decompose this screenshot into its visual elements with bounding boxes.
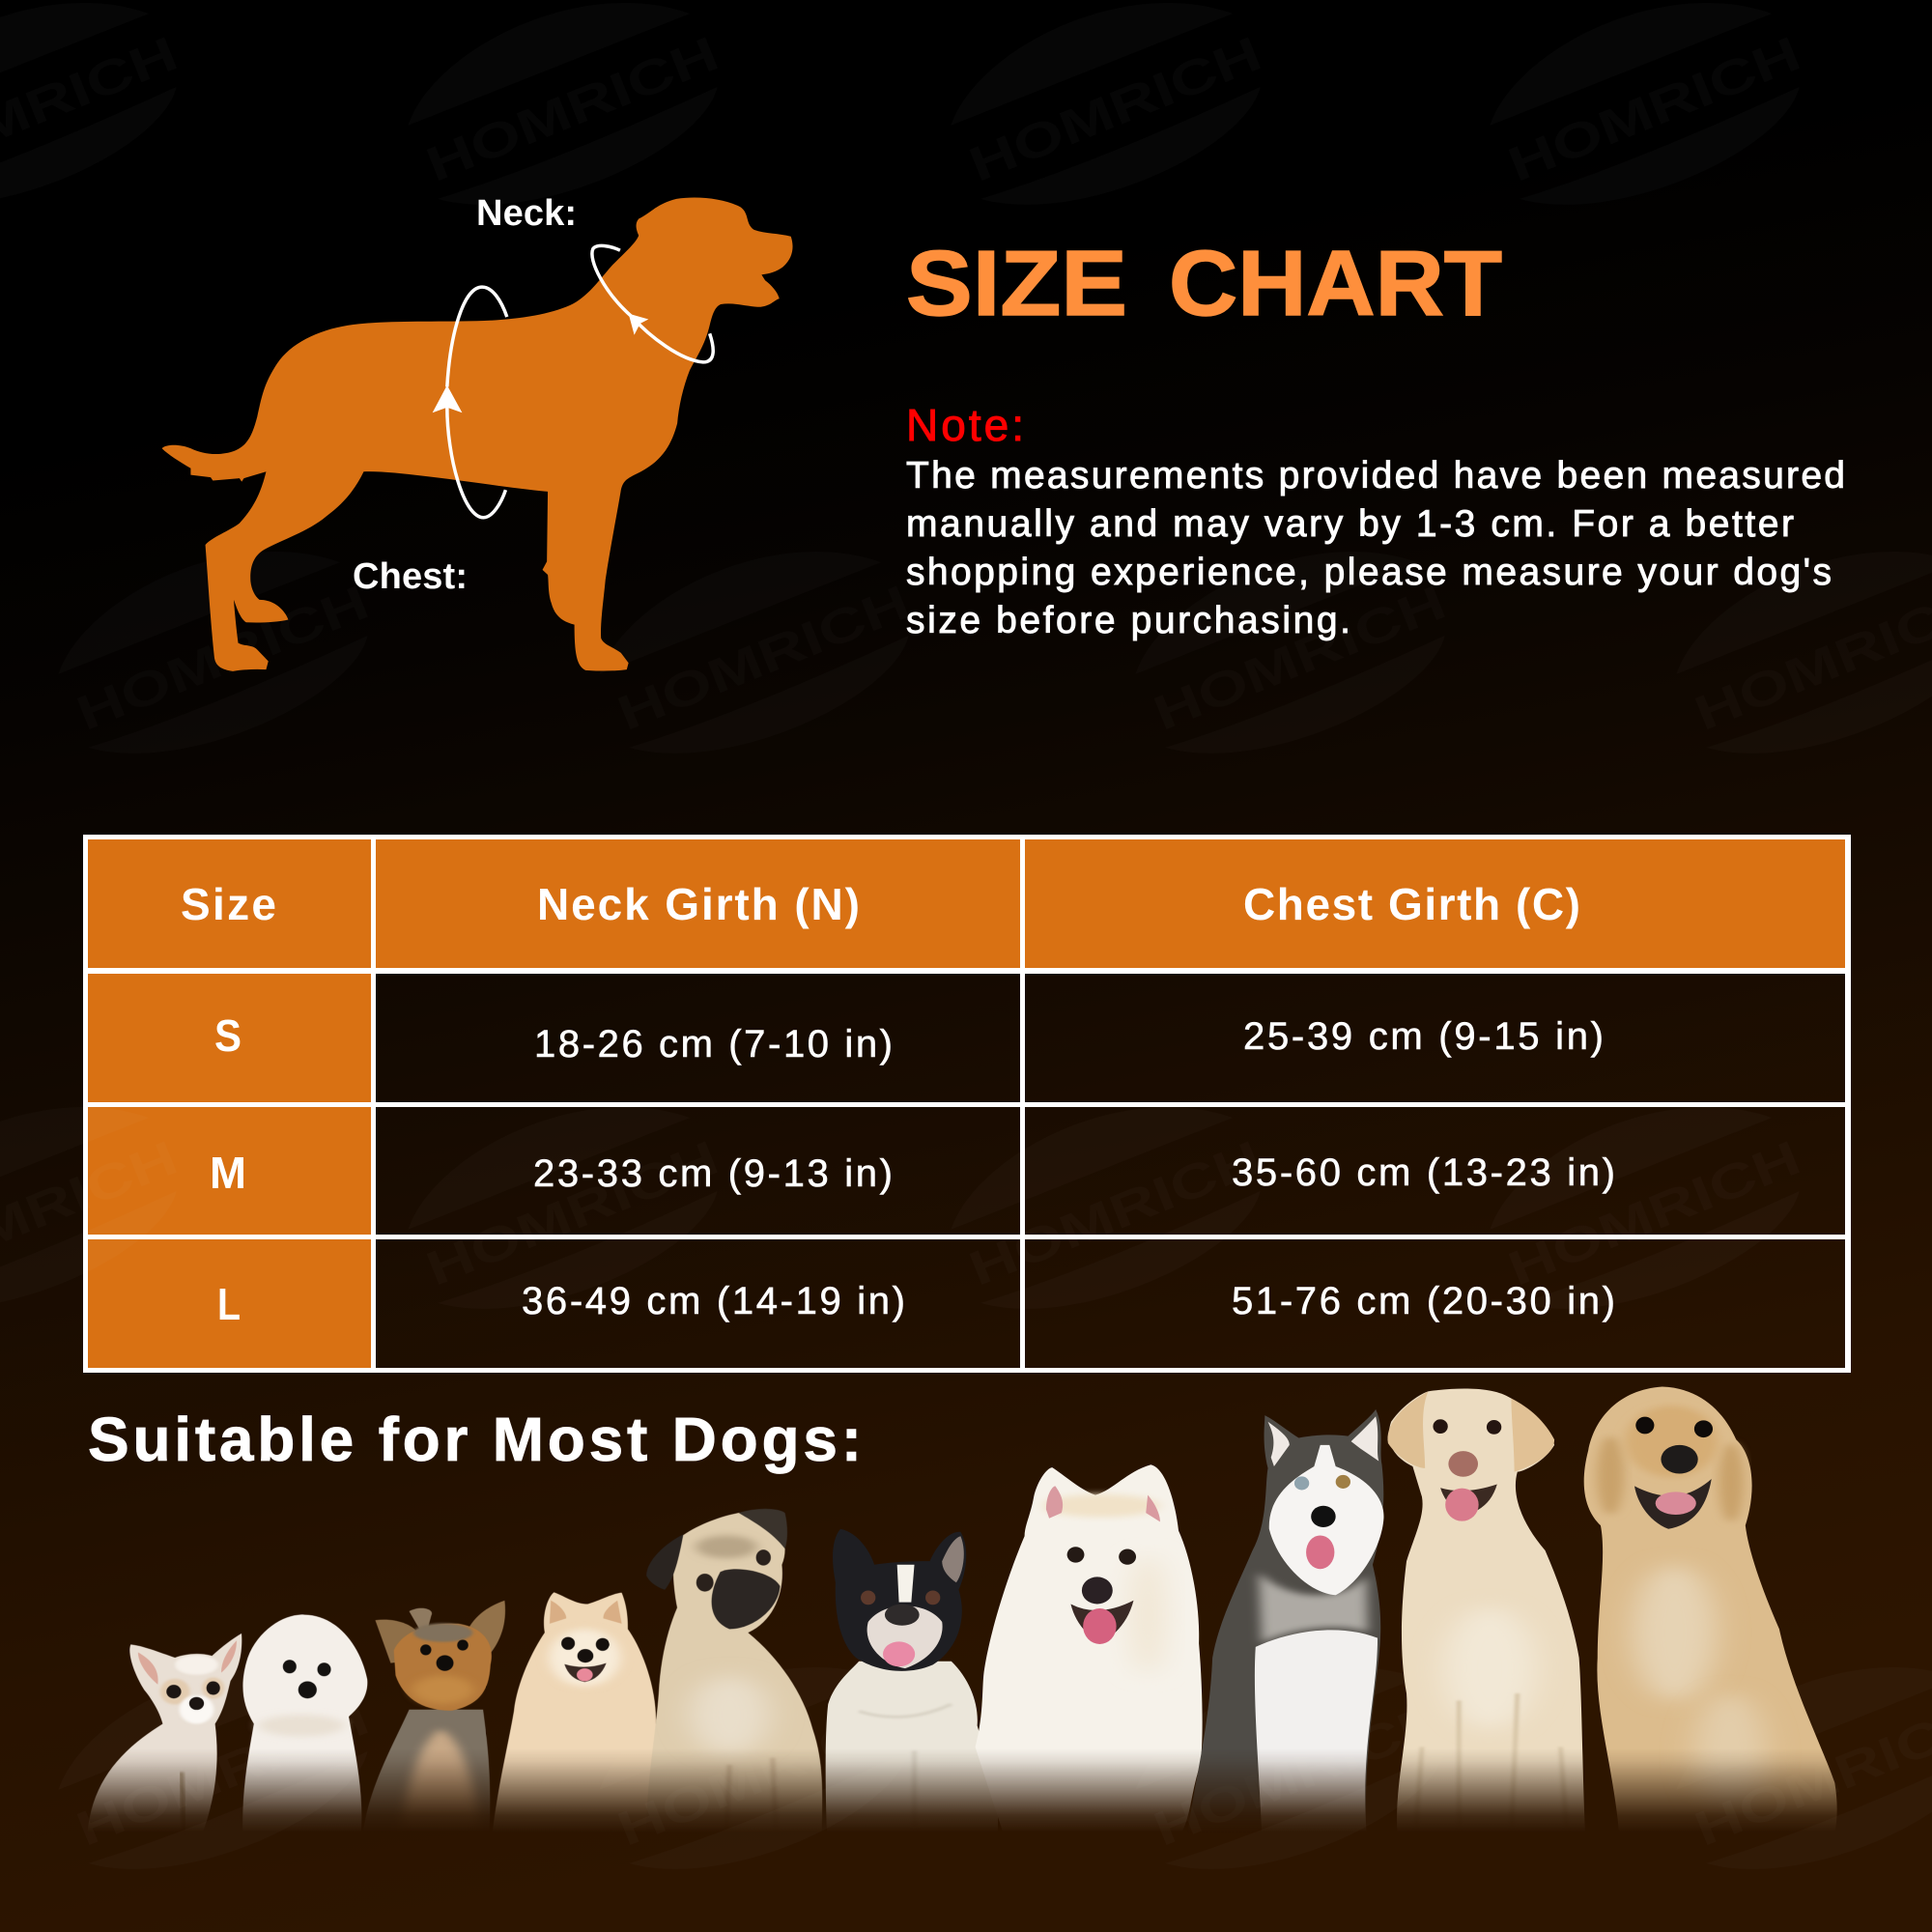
- header labels: Chest Girth (C): [1243, 879, 1580, 929]
- size cell M: [88, 1107, 371, 1235]
- dog 7: samoyed: [976, 1464, 1203, 1833]
- header labels: Size: [181, 879, 276, 929]
- note body text: [906, 455, 1845, 641]
- text: HOMRICH: [70, 1690, 376, 1857]
- dog 2: bichon: [242, 1614, 367, 1833]
- dog 5: pug: [646, 1509, 822, 1833]
- dog 6: french bulldog: [826, 1529, 998, 1833]
- header labels: Neck Girth (N): [537, 879, 860, 929]
- dog 10: golden retriever: [1584, 1387, 1837, 1833]
- note body text: manually and may vary by 1-3 cm. For a better: [906, 503, 1794, 545]
- text: HOMRICH: [1147, 1690, 1453, 1857]
- measurement values: 25-39 cm (9-15 in): [1243, 1015, 1604, 1058]
- text: HOMRICH: [1501, 26, 1807, 192]
- note body text: shopping experience, please measure your dog's: [906, 552, 1832, 593]
- table header: neck girth cell: [376, 839, 1020, 968]
- dog 9: labrador: [1387, 1388, 1585, 1833]
- heading: suitable for most dogs: Suitable for Most Dogs:: [88, 1405, 862, 1474]
- dog 8: husky: [1188, 1409, 1383, 1833]
- note body text: size before purchasing.: [906, 600, 1350, 641]
- text: HOMRICH: [419, 26, 725, 192]
- table grid lines: [83, 835, 1851, 1373]
- measurement values: 23-33 cm (9-13 in): [533, 1152, 893, 1195]
- size table: [83, 835, 1851, 1373]
- measurement values: 36-49 cm (14-19 in): [522, 1280, 905, 1322]
- icon: dog silhouette: [162, 198, 793, 671]
- text: HOMRICH: [419, 1130, 725, 1296]
- table header: chest girth cell: [1025, 839, 1845, 968]
- chest girth ring with arrow: [433, 287, 507, 518]
- measurement values: 35-60 cm (13-23 in): [1232, 1151, 1615, 1194]
- dog 3: yorkshire terrier: [363, 1601, 505, 1833]
- text: HOMRICH: [1688, 1690, 1932, 1857]
- text: HOMRICH: [1501, 1130, 1807, 1296]
- table header: size cell: [88, 839, 371, 969]
- text: HOMRICH: [611, 1690, 917, 1857]
- title: SIZE: [906, 232, 1127, 335]
- dog silhouette with girth rings: [162, 198, 793, 671]
- size labels: [210, 1010, 246, 1329]
- text: HOMRICH: [1147, 575, 1453, 741]
- text: HOMRICH: [70, 575, 376, 741]
- text: HOMRICH: [962, 26, 1268, 192]
- text: HOMRICH: [1688, 575, 1932, 741]
- measurement diagram: [162, 193, 793, 671]
- note body text: The measurements provided have been measured: [906, 455, 1845, 497]
- note heading: Note:: [906, 400, 1024, 450]
- text: HOMRICH: [611, 575, 917, 741]
- title: CHART: [1169, 232, 1502, 335]
- dog 4: pomeranian: [493, 1592, 656, 1833]
- neck girth ring with arrow: [592, 245, 713, 362]
- size labels: S: [214, 1010, 242, 1061]
- header labels: [181, 879, 1580, 929]
- dog 1: chihuahua: [88, 1634, 242, 1833]
- table text: [181, 879, 1615, 1329]
- text: HOMRICH: [962, 1130, 1268, 1296]
- size cell S: [88, 974, 371, 1102]
- size cell L: [88, 1239, 371, 1368]
- measurement values: [522, 1015, 1615, 1322]
- label: neck: Neck:: [476, 193, 577, 234]
- dog lineup illustration: [88, 1387, 1837, 1833]
- size labels: M: [210, 1148, 246, 1198]
- measurement values: 51-76 cm (20-30 in): [1232, 1280, 1615, 1322]
- size labels: L: [217, 1279, 241, 1329]
- measurement values: 18-26 cm (7-10 in): [534, 1023, 893, 1065]
- label: chest: Chest:: [353, 556, 468, 597]
- note block: [906, 400, 1845, 641]
